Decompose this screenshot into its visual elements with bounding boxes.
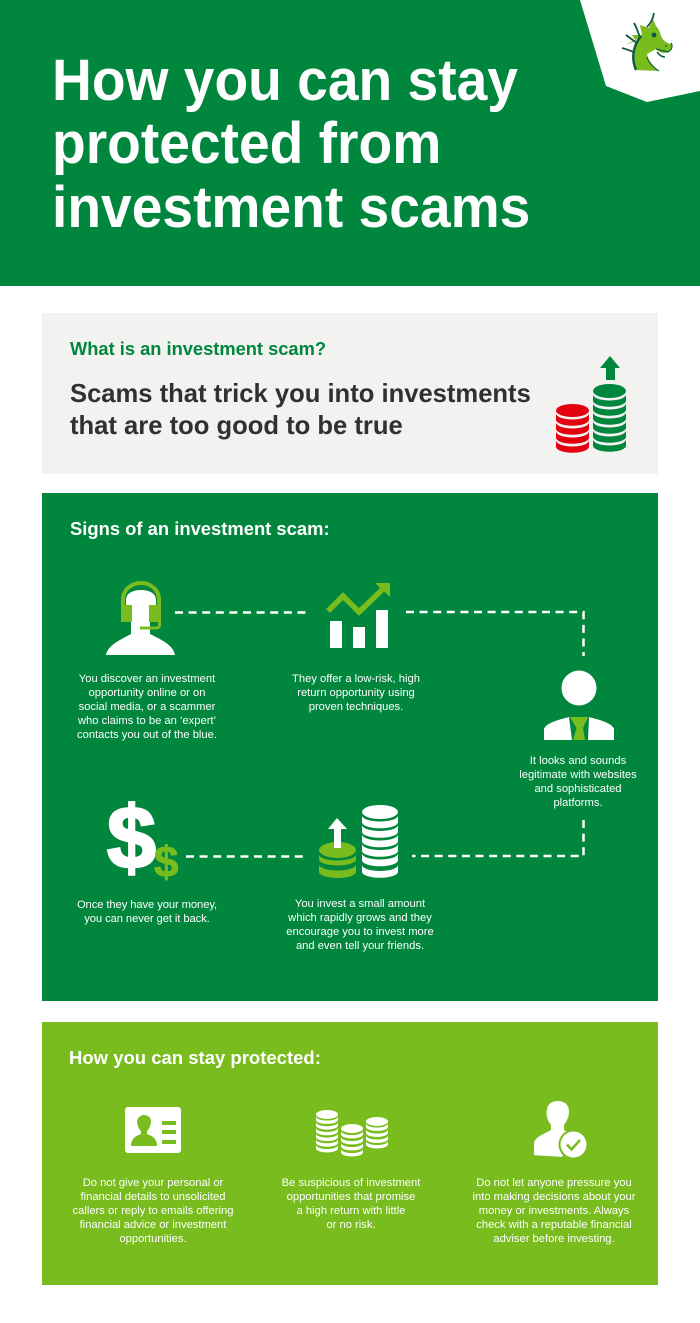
title xyxy=(52,48,530,240)
step 2 text xyxy=(292,673,420,713)
step 4 text: Once they have your money, xyxy=(77,899,217,911)
step 1 text: You discover an investment xyxy=(79,673,215,685)
step 5 text: which rapidly grows and they xyxy=(288,912,432,924)
step 5 text xyxy=(286,898,434,952)
tip 1 text: opportunities. xyxy=(119,1233,187,1245)
step 1 text xyxy=(77,673,217,741)
step 2 text: They offer a low-risk, high xyxy=(292,673,420,685)
tip 3 text: money or investments. Always xyxy=(479,1205,629,1217)
icon: dollar signs: $ xyxy=(107,788,156,887)
connector: coins to dollar xyxy=(186,855,303,858)
panel heading: protected: How you can stay protected: xyxy=(69,1047,321,1068)
tip 3 text: adviser before investing. xyxy=(493,1233,615,1245)
step 1 text: contacts you out of the blue. xyxy=(77,729,217,741)
icon: person with check xyxy=(534,1101,588,1160)
tip 1 text xyxy=(73,1177,233,1245)
icon: dollar signs xyxy=(107,788,178,887)
panel: signs of an investment scam xyxy=(42,493,658,1001)
step 4 text xyxy=(77,899,217,925)
scam definition xyxy=(70,380,531,440)
icon: dragon logo xyxy=(622,13,672,71)
tip 3 text xyxy=(473,1177,636,1245)
tip 3 text: into making decisions about your xyxy=(473,1191,635,1203)
tip 2 text: a high return with little xyxy=(297,1205,405,1217)
scam definition: Scams that trick you into investments xyxy=(70,380,531,408)
panel heading: signs: Signs of an investment scam: xyxy=(70,518,330,539)
tip 1 text: callers or reply to emails offering xyxy=(73,1205,233,1217)
title: How you can stay xyxy=(52,48,518,113)
step 5 text: encourage you to invest more xyxy=(286,926,434,938)
icon: coin stacks with arrow xyxy=(556,356,626,453)
tip 2 text: or no risk. xyxy=(326,1219,376,1231)
tip 1 text: Do not give your personal or xyxy=(83,1177,223,1189)
icon: rising chart xyxy=(328,583,390,648)
step 5 text: and even tell your friends. xyxy=(296,940,424,952)
step 3 text: legitimate with websites xyxy=(519,769,637,781)
step 2 text: return opportunity using xyxy=(297,687,415,699)
connector: chart to person xyxy=(406,612,584,656)
header banner xyxy=(0,0,700,286)
icon: growing coins with arrow xyxy=(319,805,398,878)
scam definition: that are too good to be true xyxy=(70,412,403,440)
icon: ID card xyxy=(125,1107,181,1153)
icon: headset person xyxy=(106,583,175,655)
step 1 text: social media, or a scammer xyxy=(79,701,215,713)
step 1 text: opportunity online or on xyxy=(89,687,205,699)
tip 2 text: opportunities that promise xyxy=(287,1191,415,1203)
tip 1 text: financial details to unsolicited xyxy=(81,1191,225,1203)
tip 1 text: financial advice or investment xyxy=(80,1219,226,1231)
step 3 text xyxy=(519,755,637,809)
tip 3 text: Do not let anyone pressure you xyxy=(476,1177,632,1189)
tip 2 text xyxy=(282,1177,420,1231)
step 3 text: and sophisticated xyxy=(534,783,622,795)
step 2 text: proven techniques. xyxy=(309,701,403,713)
step 3 text: It looks and sounds xyxy=(530,755,626,767)
step 4 text: you can never get it back. xyxy=(84,913,210,925)
icon: person with tie xyxy=(544,670,614,740)
icon: three coin stacks xyxy=(316,1110,388,1156)
step 1 text: who claims to be an ‘expert’ xyxy=(78,715,216,727)
connector: headset to chart xyxy=(175,611,307,614)
step 5 text: You invest a small amount xyxy=(295,898,425,910)
tip 2 text: Be suspicious of investment xyxy=(282,1177,420,1189)
step 3 text: platforms. xyxy=(553,797,603,809)
title: protected from xyxy=(52,111,441,176)
connector: person to coins xyxy=(412,820,584,856)
logo tab xyxy=(580,0,700,102)
icon: dollar signs: $ xyxy=(154,838,178,887)
panel: how you can stay protected xyxy=(42,1022,658,1285)
panel heading: what is a scam: What is an investment scam? xyxy=(70,338,326,359)
title: investment scams xyxy=(52,175,530,240)
tip 3 text: check with a reputable financial xyxy=(476,1219,632,1231)
panel: what is an investment scam xyxy=(42,313,658,474)
